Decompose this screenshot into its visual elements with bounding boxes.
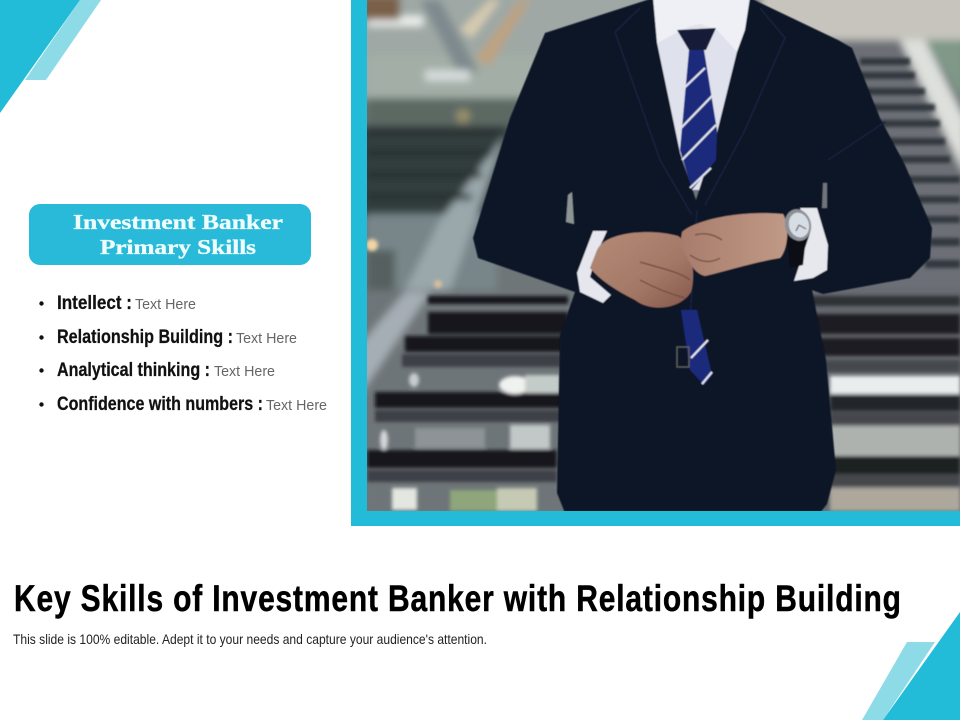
item: relationship building: Relationship Building : (57, 327, 233, 348)
background right (760, 0, 960, 42)
heading box (29, 204, 311, 265)
corner decoration: bottom right (862, 612, 960, 720)
item: confidence with numbers: Text Here (266, 398, 327, 414)
item: intellect (39, 293, 196, 314)
heading text: Investment Banker (73, 210, 283, 234)
left hand (590, 232, 693, 308)
subtitle: This slide is 100% editable. Adept it to your needs and capture your audience's attention. (13, 631, 487, 647)
tie (677, 28, 717, 385)
item: relationship building: Text Here (236, 331, 297, 347)
photo background: blurred stairs (350, 0, 960, 511)
item: analytical thinking: Analytical thinking : (57, 360, 210, 381)
skills list (39, 293, 327, 415)
shirt and collar (650, 0, 752, 190)
corner decoration: top left (0, 0, 101, 113)
suit lapels (615, 8, 885, 320)
heading text: Primary Skills (100, 235, 256, 259)
title: Key Skills of Investment Banker with Relationship Building (14, 579, 901, 620)
item: intellect: Text Here (135, 297, 196, 313)
right shirt cuff (794, 208, 828, 281)
photo frame (351, 0, 960, 526)
suit body (473, 0, 932, 513)
left shirt cuff (577, 231, 611, 303)
right hand (680, 213, 787, 276)
person in navy suit (473, 0, 932, 513)
wristwatch (784, 208, 812, 268)
gaps between arms and torso (566, 192, 574, 224)
item: confidence with numbers: Confidence with numbers : (57, 394, 263, 415)
item: intellect: Intellect : (57, 293, 132, 314)
photo: businessman buttoning suit on stairs (350, 0, 960, 513)
item: analytical thinking: Text Here (214, 364, 275, 380)
